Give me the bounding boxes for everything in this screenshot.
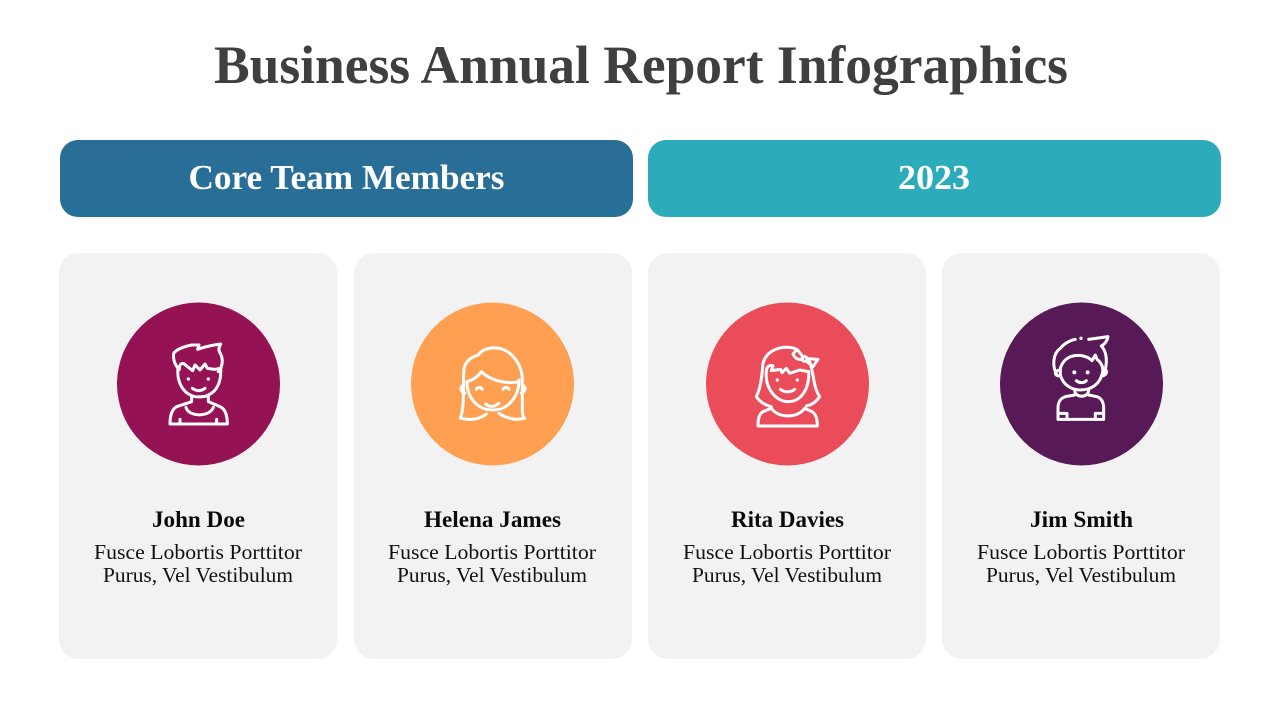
icon: John Doe avatar xyxy=(117,302,280,466)
name: John Doe: John Doe xyxy=(152,507,245,532)
icon: Jim Smith avatar xyxy=(1000,302,1163,466)
description: Rita Davies xyxy=(683,540,891,587)
panel: Helena James xyxy=(354,253,632,659)
header: core team members: Core Team Members xyxy=(188,158,505,197)
title: Business Annual Report Infographics xyxy=(214,35,1068,95)
description: Jim Smith: Purus, Vel Vestibulum xyxy=(986,563,1176,587)
header: year xyxy=(648,140,1221,217)
name: Jim Smith: Jim Smith xyxy=(1030,507,1133,532)
description: John Doe: Purus, Vel Vestibulum xyxy=(103,563,293,587)
description: Helena James: Purus, Vel Vestibulum xyxy=(397,563,587,587)
description: Jim Smith xyxy=(977,540,1185,587)
description: Helena James xyxy=(388,540,596,587)
icon: Helena James avatar xyxy=(411,302,574,466)
header: year: 2023 xyxy=(898,158,970,197)
description: Helena James: Fusce Lobortis Porttitor xyxy=(388,540,596,564)
description: Rita Davies: Purus, Vel Vestibulum xyxy=(692,563,882,587)
panel: John Doe xyxy=(59,253,337,659)
description: Jim Smith: Fusce Lobortis Porttitor xyxy=(977,540,1185,564)
panel: Jim Smith xyxy=(942,253,1220,659)
description: John Doe xyxy=(94,540,302,587)
name: Rita Davies: Rita Davies xyxy=(731,507,844,532)
panel: Rita Davies xyxy=(648,253,926,659)
description: John Doe: Fusce Lobortis Porttitor xyxy=(94,540,302,564)
name: Helena James: Helena James xyxy=(424,507,561,532)
icon: Rita Davies avatar xyxy=(706,302,869,466)
header: core team members xyxy=(60,140,633,217)
description: Rita Davies: Fusce Lobortis Porttitor xyxy=(683,540,891,564)
